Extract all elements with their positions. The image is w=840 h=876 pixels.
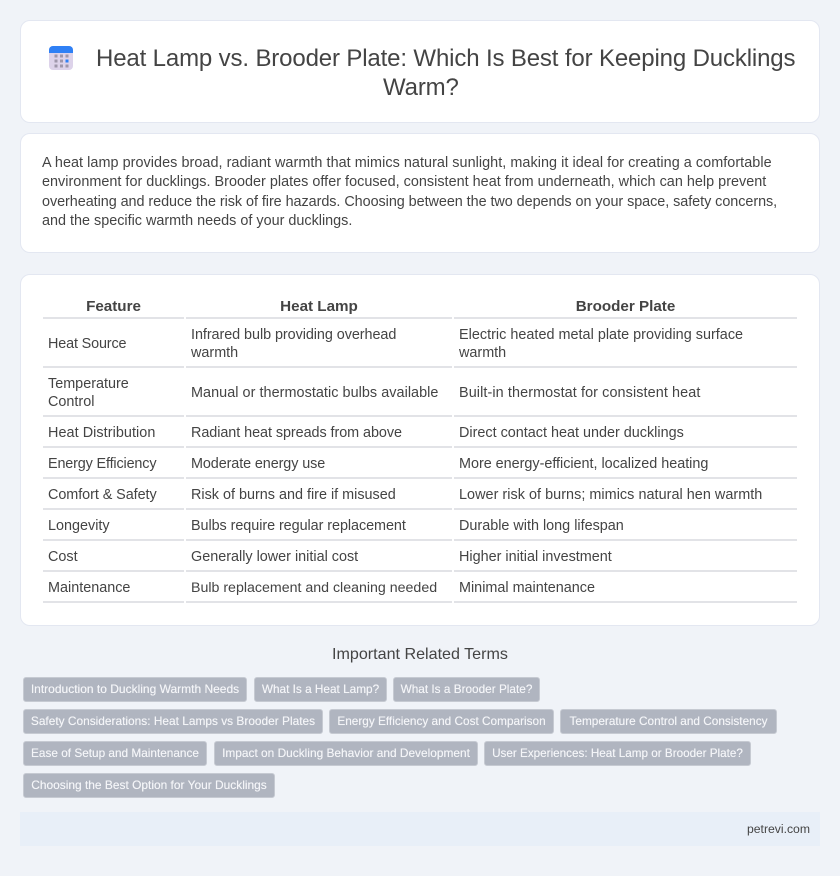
introduction text: overheating and reduce the risk of fire hazards. Choosing between the two depends on your space, safety concerns, [42, 194, 777, 210]
comparison table: Comfort & Safety [48, 487, 157, 503]
comparison table: warmth [459, 345, 506, 361]
comparison table: Longevity [48, 518, 110, 534]
related terms tags: Choosing the Best Option for Your Ducklings [31, 778, 267, 792]
comparison table: Moderate energy use [191, 456, 325, 472]
comparison table [43, 298, 797, 603]
comparison table: Bulb replacement and cleaning needed [191, 580, 437, 596]
comparison table: Maintenance [48, 580, 130, 596]
related terms tags: What Is a Brooder Plate? [401, 682, 532, 696]
related terms tags: Ease of Setup and Maintenance [31, 746, 199, 760]
comparison table: Manual or thermostatic bulbs available [191, 385, 438, 401]
comparison table: Energy Efficiency [48, 456, 156, 472]
related terms tags: Safety Considerations: Heat Lamps vs Brooder Plates [31, 714, 315, 728]
comparison table: Lower risk of burns; mimics natural hen warmth [459, 487, 762, 503]
title [96, 45, 795, 101]
comparison table: Heat Source [48, 336, 126, 352]
comparison table: Radiant heat spreads from above [191, 425, 402, 441]
introduction text: and the specific warmth needs of your ducklings. [42, 213, 352, 229]
comparison table: Electric heated metal plate providing surface [459, 327, 743, 343]
comparison table: Higher initial investment [459, 549, 612, 565]
table header: brooder plate: Brooder Plate [576, 298, 675, 315]
comparison table: Control [48, 394, 94, 410]
icon: calendar [49, 46, 73, 70]
title: Warm? [383, 74, 459, 101]
heading: important related terms: Important Related Terms [332, 645, 508, 663]
comparison table: Built-in thermostat for consistent heat [459, 385, 700, 401]
header panel [20, 20, 820, 123]
related terms tags: Introduction to Duckling Warmth Needs [31, 682, 239, 696]
comparison table: Bulbs require regular replacement [191, 518, 406, 534]
footer source: petrevi.com [747, 822, 810, 836]
comparison table: More energy-efficient, localized heating [459, 456, 708, 472]
comparison table: Direct contact heat under ducklings [459, 425, 684, 441]
panel: comparison table [20, 274, 820, 626]
footer bar [20, 812, 820, 846]
table header: feature: Feature [86, 298, 141, 315]
related terms tags: What Is a Heat Lamp? [262, 682, 379, 696]
related terms tags: User Experiences: Heat Lamp or Brooder Plate? [492, 747, 743, 760]
introduction text: environment for ducklings. Brooder plates offer focused, consistent heat from underneath, which can help prevent [42, 174, 766, 190]
comparison table: Heat Distribution [48, 425, 155, 441]
related terms tags: Temperature Control and Consistency [569, 714, 768, 728]
comparison table: Durable with long lifespan [459, 518, 624, 534]
related terms tags: Energy Efficiency and Cost Comparison [337, 714, 546, 728]
introduction text: A heat lamp provides broad, radiant warmth that mimics natural sunlight, making it ideal for creating a comfortable [42, 155, 772, 171]
comparison table: Minimal maintenance [459, 580, 595, 596]
table header: heat lamp: Heat Lamp [280, 298, 358, 315]
comparison table: Risk of burns and fire if misused [191, 487, 396, 503]
related terms tags: Impact on Duckling Behavior and Development [222, 746, 470, 760]
title: Heat Lamp vs. Brooder Plate: Which Is Best for Keeping Ducklings [96, 45, 795, 72]
panel: introduction paragraph [20, 133, 820, 253]
comparison table: warmth [191, 345, 238, 361]
comparison table: Cost [48, 549, 78, 565]
introduction text [42, 155, 777, 229]
related terms tags [23, 677, 777, 798]
comparison table: Temperature [48, 376, 129, 392]
comparison table: Infrared bulb providing overhead [191, 327, 396, 343]
comparison table: Generally lower initial cost [191, 549, 358, 565]
